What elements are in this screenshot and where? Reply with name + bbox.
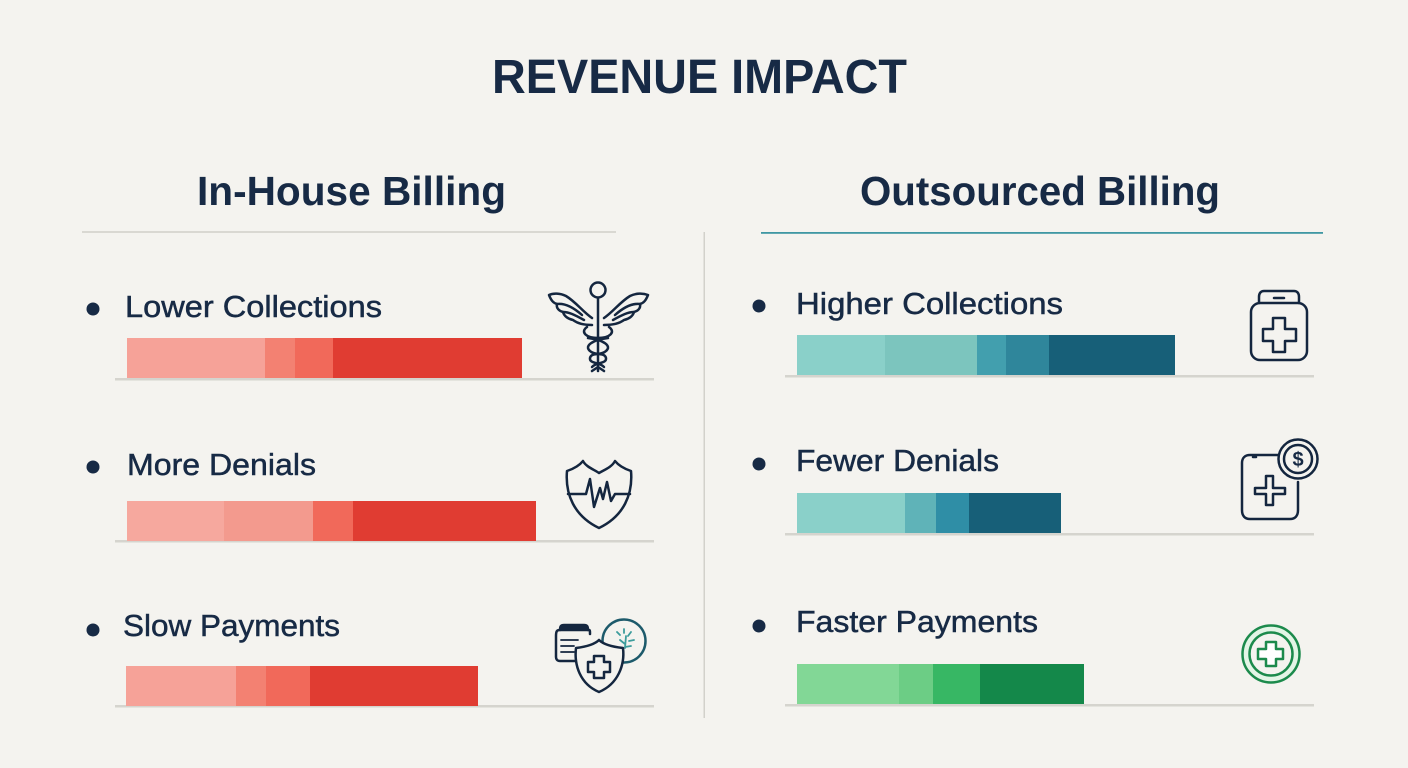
- bar: faster payments: [797, 664, 1084, 704]
- row: higher collections: Higher Collections: [796, 286, 1063, 321]
- row: fewer denials: [752, 440, 1318, 536]
- icon: green medical target: [1242, 626, 1300, 682]
- icon: shield with heartbeat: [567, 461, 631, 528]
- row: slow payments: Slow Payments: [123, 608, 340, 643]
- row: higher collections: [752, 286, 1314, 378]
- icon: tablet with dollar coin: [1242, 440, 1318, 519]
- row: slow payments: [86, 608, 654, 708]
- title: REVENUE IMPACT: [492, 51, 907, 104]
- row: more denials: More Denials: [127, 447, 316, 482]
- icon: tablet with dollar coin: $: [1292, 449, 1304, 471]
- bar: higher collections: [797, 335, 1175, 375]
- row: lower collections: Lower Collections: [125, 289, 382, 324]
- bar: more denials: [127, 501, 536, 541]
- row: lower collections: [86, 282, 654, 380]
- heading: in-house billing: In-House Billing: [197, 168, 506, 214]
- heading: outsourced billing: Outsourced Billing: [860, 168, 1220, 214]
- row: faster payments: [752, 604, 1314, 706]
- icon: medical case: [1251, 291, 1307, 360]
- icon: records, shield and gauge: [556, 620, 646, 692]
- row: more denials: [86, 447, 654, 542]
- panel: in-house billing: [82, 168, 654, 708]
- row: faster payments: Faster Payments: [796, 604, 1038, 639]
- row: fewer denials: Fewer Denials: [796, 443, 999, 478]
- icon: caduceus: [549, 282, 648, 371]
- panel: outsourced billing: [752, 168, 1323, 706]
- bar: lower collections: [127, 338, 522, 378]
- bar: slow payments: [126, 666, 478, 706]
- bar: fewer denials: [797, 493, 1061, 533]
